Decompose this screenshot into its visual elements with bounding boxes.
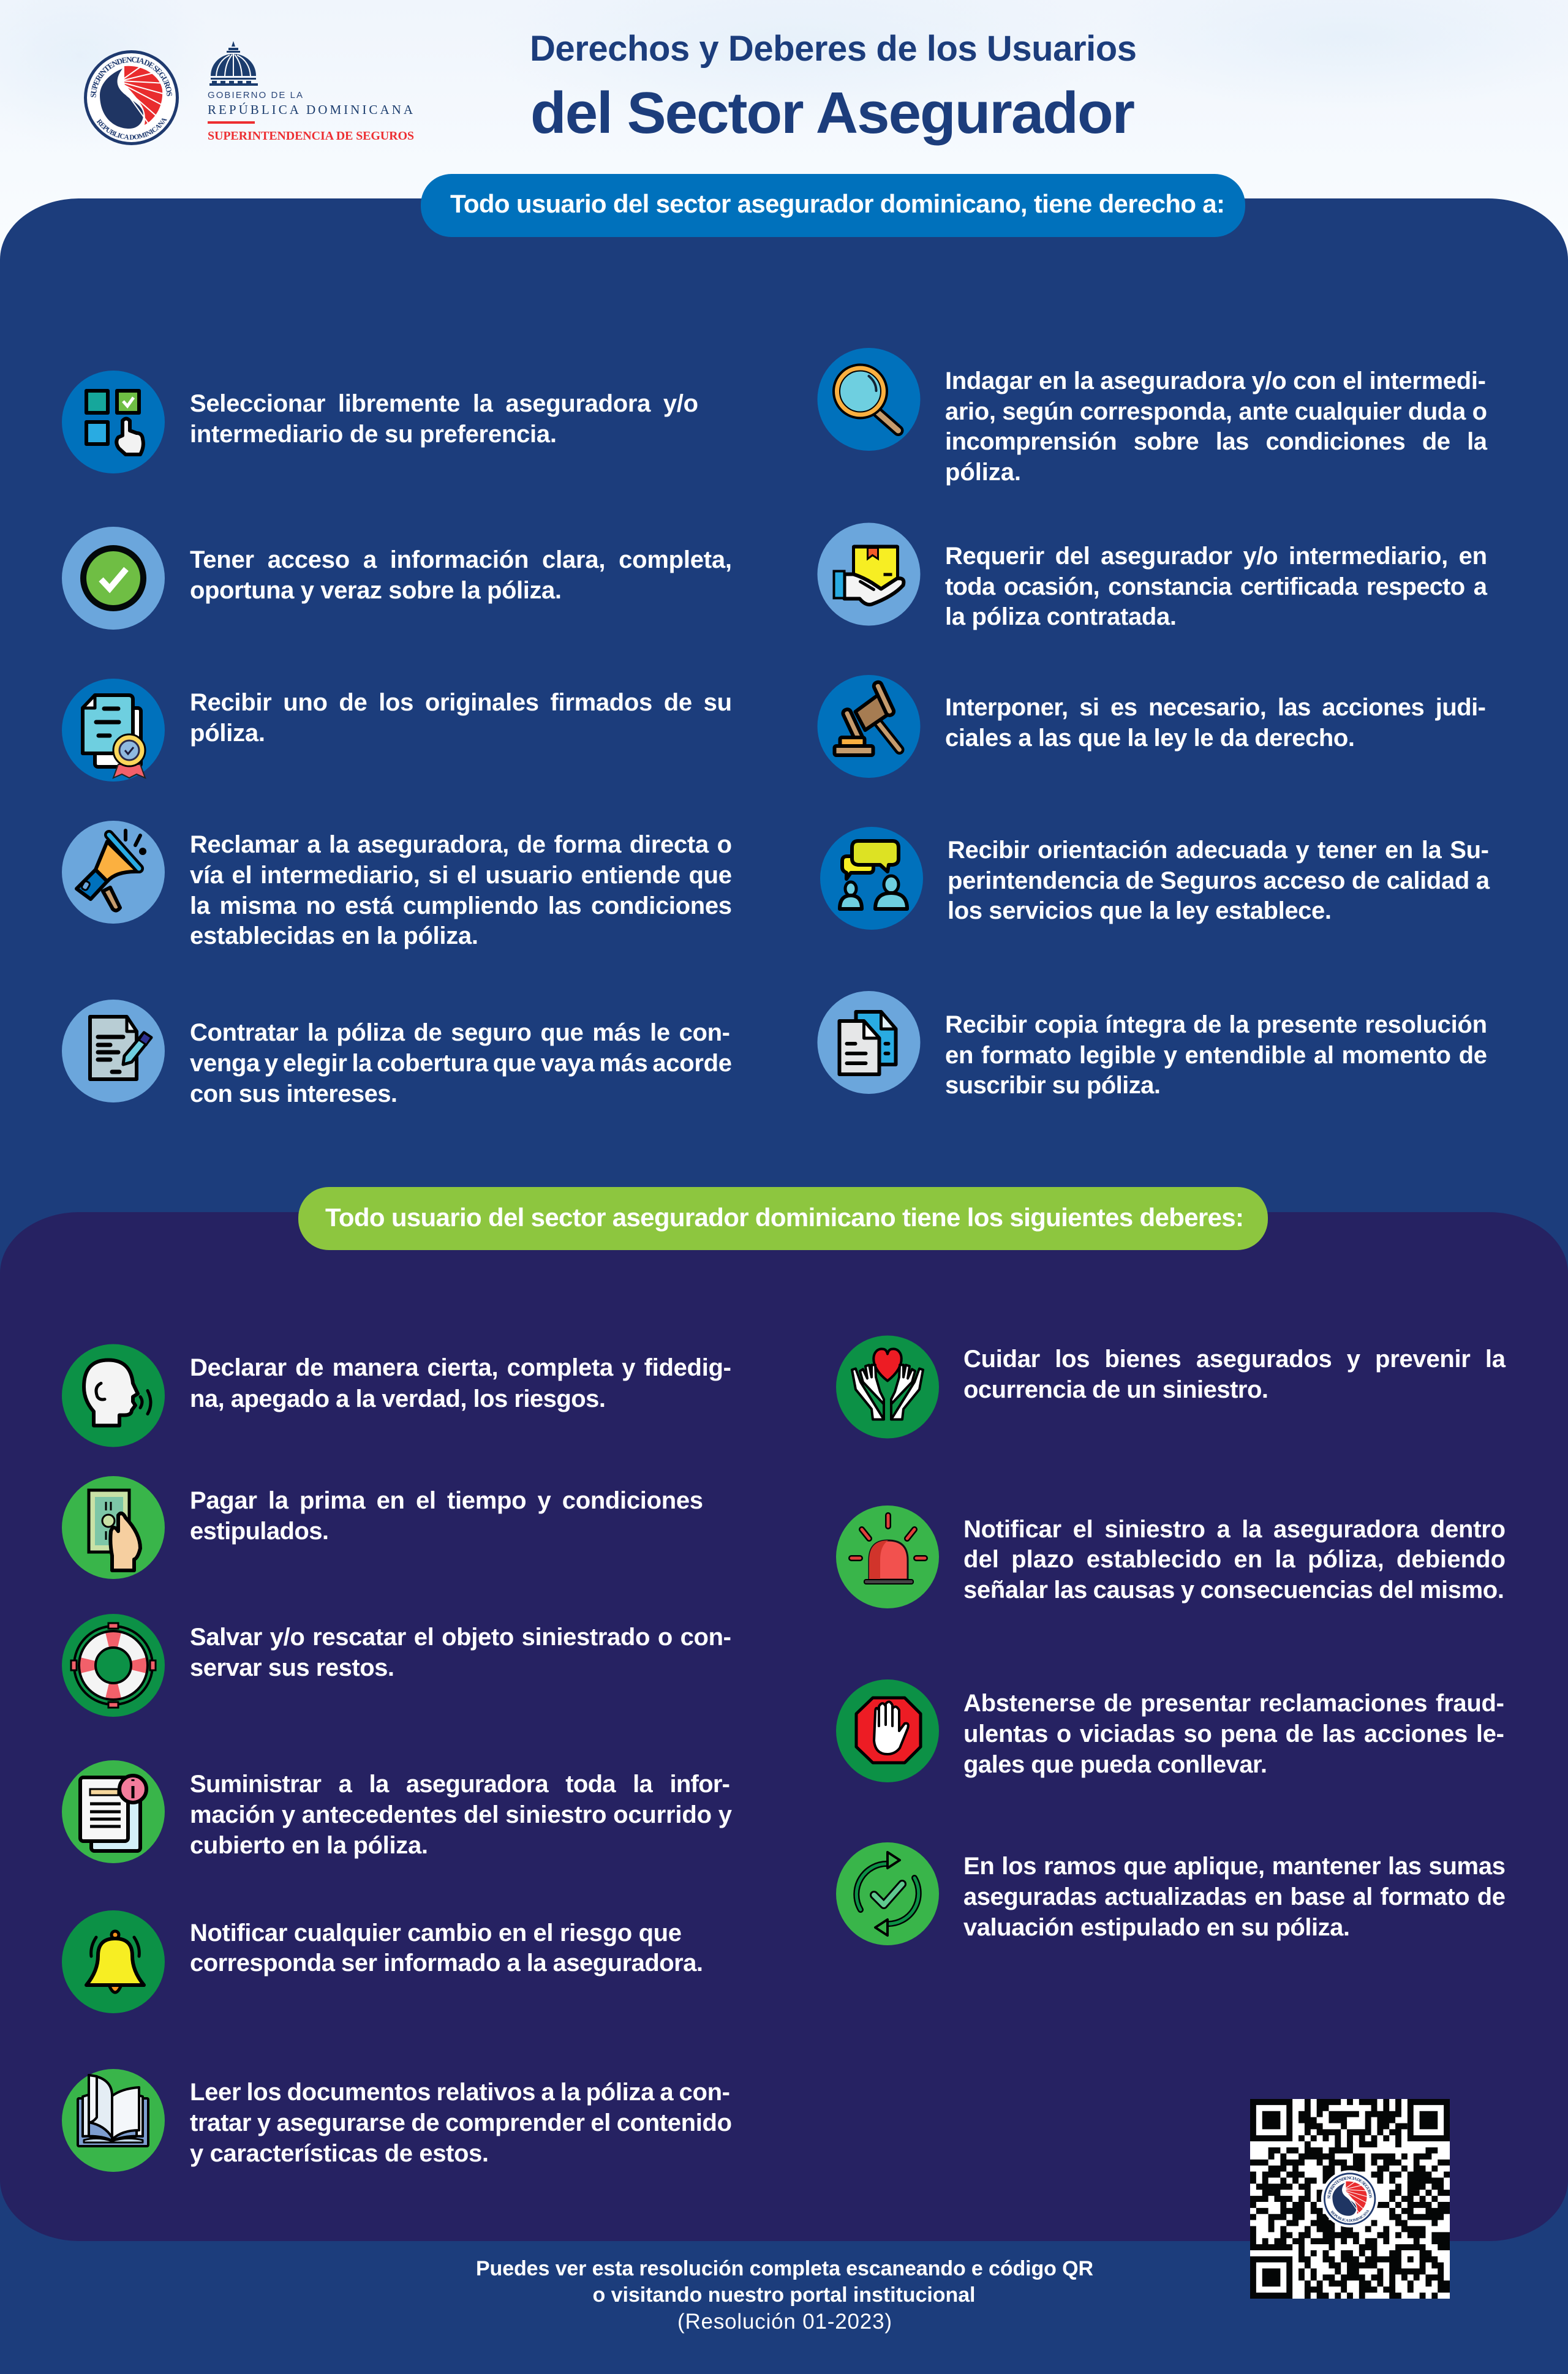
footer text: Puedes ver esta resolución completa escaneando e código QR xyxy=(476,2257,1093,2280)
text: póliza. xyxy=(190,720,265,747)
icon: document with medal xyxy=(62,679,165,782)
text: Tener acceso a información clara, completa, xyxy=(190,546,732,573)
text: tratar y asegurarse de comprender el contenido xyxy=(190,2109,732,2136)
footer text: (Resolución 01-2023) xyxy=(677,2310,892,2334)
text: la póliza contratada. xyxy=(945,603,1177,630)
icon: document with pencil xyxy=(62,1000,165,1102)
text: na, apegado a la verdad, los riesgos. xyxy=(190,1385,606,1412)
item: indagar xyxy=(817,348,1488,486)
text: incomprensión sobre las condiciones de la xyxy=(945,428,1488,455)
icon: refresh with check xyxy=(836,1842,939,1945)
icon: people with speech bubbles xyxy=(820,827,923,930)
text xyxy=(190,1354,731,1412)
text: ciales a las que la ley le da derecho. xyxy=(945,725,1355,752)
text: toda ocasión, constancia certificada respecto a xyxy=(945,573,1488,600)
text: estipulados. xyxy=(190,1518,329,1545)
item: requerir constancia xyxy=(817,523,1488,630)
text: Recibir uno de los originales firmados de su xyxy=(190,689,732,716)
text: ario, según corresponda, ante cualquier duda o xyxy=(945,398,1487,425)
text: valuación estipulado en su póliza. xyxy=(963,1914,1350,1941)
item: notificar siniestro xyxy=(836,1505,1506,1608)
item: leer documentos xyxy=(62,2069,732,2172)
text: Leer los documentos relativos a la póliza a con- xyxy=(190,2079,730,2106)
item: salvar xyxy=(62,1614,731,1717)
icon: QR centre seal xyxy=(1321,2170,1378,2228)
text: En los ramos que aplique, mantener las sumas xyxy=(963,1853,1506,1880)
item: cuidar bienes xyxy=(836,1335,1506,1438)
text: suscribir su póliza. xyxy=(945,1072,1161,1099)
item: reclamar xyxy=(62,821,732,949)
title: Derechos y Deberes de los Usuarios xyxy=(530,29,1137,69)
text xyxy=(190,1487,703,1545)
text: Seleccionar libremente la aseguradora y/o xyxy=(190,390,698,417)
text: Notificar cualquier cambio en el riesgo que xyxy=(190,1920,682,1946)
text: ocurrencia de un siniestro. xyxy=(963,1376,1268,1403)
text xyxy=(190,689,732,747)
icon: open book xyxy=(62,2069,165,2172)
icon: hand holding box xyxy=(817,523,920,626)
text xyxy=(190,1624,731,1681)
item: copia integra xyxy=(817,991,1487,1099)
title xyxy=(530,29,1137,146)
logo: Superintendencia de Seguros seal: REPUBLICA DOMINICANA xyxy=(97,118,167,140)
text: la misma no está cumpliendo las condiciones xyxy=(190,892,732,919)
heading pill: deberes xyxy=(298,1187,1268,1250)
text xyxy=(945,367,1488,486)
text: del plazo establecido en la póliza, debiendo xyxy=(963,1546,1506,1573)
text: oportuna y veraz sobre la póliza. xyxy=(190,577,562,604)
icon: magnifying glass xyxy=(817,348,920,451)
text: póliza. xyxy=(945,459,1021,486)
text xyxy=(945,1011,1487,1099)
text: y características de estos. xyxy=(190,2140,489,2167)
text: mación y antecedentes del siniestro ocurrido y xyxy=(190,1801,733,1828)
text xyxy=(963,1690,1504,1778)
text: aseguradas actualizadas en base al formato de xyxy=(963,1883,1506,1910)
heading pill: derechos xyxy=(421,174,1245,237)
text: venga y elegir la cobertura que vaya más acorde xyxy=(190,1050,732,1077)
item: declarar xyxy=(62,1344,731,1447)
icon: QR centre seal: REPUBLICA DOMINICANA xyxy=(1330,2210,1370,2222)
text: gales que pueda conllevar. xyxy=(963,1751,1267,1778)
text xyxy=(190,2079,732,2167)
icon: check mark xyxy=(62,527,165,630)
icon: stop hand xyxy=(836,1679,939,1782)
title: del Sector Asegurador xyxy=(530,80,1135,146)
icon: grid with pointer hand xyxy=(62,371,165,473)
item: originales firmados xyxy=(62,679,732,782)
text: con sus intereses. xyxy=(190,1080,398,1107)
panel background purple xyxy=(0,1212,1568,2241)
text xyxy=(190,831,732,949)
text: cubierto en la póliza. xyxy=(190,1832,428,1859)
text xyxy=(945,543,1488,630)
item: notificar cambio xyxy=(62,1910,703,2013)
icon: two documents xyxy=(817,991,920,1094)
text xyxy=(190,390,698,448)
header background xyxy=(0,0,1568,282)
text xyxy=(963,1346,1506,1403)
logo: Gobierno de la República Dominicana: REPÚBLICA DOMINICANA xyxy=(208,102,413,117)
text: Suministrar a la aseguradora toda la infor- xyxy=(190,1771,730,1798)
icon: gavel xyxy=(817,675,920,778)
text xyxy=(190,1019,732,1107)
text: en formato legible y entendible al momento de xyxy=(945,1042,1487,1069)
text: Abstenerse de presentar reclamaciones fraud- xyxy=(963,1690,1504,1717)
text: vía el intermediario, si el usuario entiende que xyxy=(190,862,732,889)
text xyxy=(190,1920,703,1976)
text: perintendencia de Seguros acceso de calidad a xyxy=(948,867,1490,894)
icon: bell xyxy=(62,1910,165,2013)
logo: Gobierno de la República Dominicana: GOBIERNO DE LA xyxy=(208,90,303,100)
text xyxy=(190,546,732,604)
icon: document with info badge xyxy=(62,1760,165,1863)
text: corresponda ser informado a la aseguradora. xyxy=(190,1950,703,1976)
text xyxy=(963,1853,1506,1941)
icon: speaking head xyxy=(62,1344,165,1447)
text: Requerir del asegurador y/o intermediario, en xyxy=(945,543,1487,570)
text: intermediario de su preferencia. xyxy=(190,421,557,448)
footer text xyxy=(476,2257,1093,2334)
text: los servicios que la ley establece. xyxy=(948,897,1332,924)
logo: Superintendencia de Seguros seal: SUPERINTENDENCIA DE SEGUROS xyxy=(91,56,172,97)
text: servar sus restos. xyxy=(190,1654,394,1681)
text: Interponer, si es necesario, las acciones judi- xyxy=(945,694,1486,721)
logo: Superintendencia de Seguros seal xyxy=(84,50,179,145)
text xyxy=(948,837,1490,924)
text xyxy=(190,1771,733,1859)
text: Indagar en la aseguradora y/o con el intermedi- xyxy=(945,367,1486,394)
icon: banknote in hand xyxy=(62,1476,165,1579)
icon: hands with heart xyxy=(836,1335,939,1438)
icon: megaphone xyxy=(62,821,165,924)
icon: alarm siren xyxy=(836,1505,939,1608)
item: pagar la prima xyxy=(62,1476,703,1579)
text: Recibir copia íntegra de la presente resolución xyxy=(945,1011,1487,1038)
text xyxy=(963,1516,1506,1603)
footer text: o visitando nuestro portal institucional xyxy=(593,2283,975,2307)
item: abstenerse xyxy=(836,1679,1504,1782)
text: Declarar de manera cierta, completa y fidedig- xyxy=(190,1354,731,1381)
text: ulentas o viciadas so pena de las acciones le- xyxy=(963,1720,1504,1747)
item: seleccionar xyxy=(62,371,698,473)
item: acciones judiciales xyxy=(817,675,1486,778)
text: Reclamar a la aseguradora, de forma directa o xyxy=(190,831,732,858)
panel: deberes xyxy=(0,1187,1568,2241)
text: señalar las causas y consecuencias del mismo. xyxy=(963,1577,1504,1603)
text: establecidas en la póliza. xyxy=(190,922,478,949)
text: Cuidar los bienes asegurados y prevenir la xyxy=(963,1346,1506,1373)
text xyxy=(945,694,1486,752)
text: Salvar y/o rescatar el objeto siniestrado o con- xyxy=(190,1624,731,1651)
heading pill: derechos: Todo usuario del sector asegurador dominicano, tiene derecho a: xyxy=(450,189,1225,218)
text: Notificar el siniestro a la aseguradora dentro xyxy=(963,1516,1506,1543)
text: Pagar la prima en el tiempo y condiciones xyxy=(190,1487,703,1514)
icon: QR centre seal: SUPERINTENDENCIA DE SEGUROS xyxy=(1327,2176,1372,2199)
item: acceso a informacion xyxy=(62,527,732,630)
logo: Gobierno de la República Dominicana: SUPERINTENDENCIA DE SEGUROS xyxy=(208,129,414,143)
QR code xyxy=(1250,2099,1450,2299)
item: orientacion xyxy=(820,827,1490,930)
text: Contratar la póliza de seguro que más le con- xyxy=(190,1019,730,1046)
item: contratar xyxy=(62,1000,732,1107)
item: suministrar xyxy=(62,1760,733,1863)
item: sumas actualizadas xyxy=(836,1842,1506,1945)
heading pill: deberes: Todo usuario del sector asegurador dominicano tiene los siguientes deberes: xyxy=(325,1203,1244,1232)
logo: Gobierno de la República Dominicana xyxy=(208,41,414,143)
text: Recibir orientación adecuada y tener en la Su- xyxy=(948,837,1489,864)
icon: lifebuoy xyxy=(62,1614,165,1717)
